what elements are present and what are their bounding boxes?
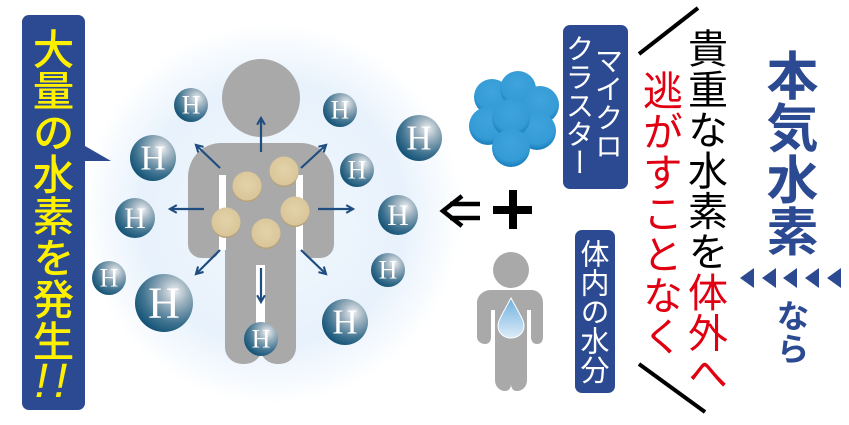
hydrogen spheres: H — [348, 156, 367, 184]
label text: 体内の水分 — [576, 239, 608, 384]
text: なら: なら — [772, 299, 809, 365]
callout tail — [85, 146, 111, 161]
bracket lines — [639, 8, 705, 412]
panel: 大量の水素を発生 callout — [22, 15, 85, 410]
hydrogen spheres: H — [331, 96, 350, 124]
hydrogen spheres: H — [406, 118, 432, 158]
heading: 貴重な水素を体外へ: 貴重な水素を 体外へ — [682, 28, 726, 393]
exclamation marks: !! — [35, 355, 73, 408]
slits highlight — [219, 175, 303, 250]
hydrogen spheres: H — [379, 256, 398, 284]
label text: クラスター: クラスター — [562, 34, 594, 176]
label text: マイクロ: マイクロ — [590, 46, 622, 160]
panel: 体内の水分 label — [575, 230, 615, 393]
small human with water drop — [477, 252, 543, 391]
hydrogen spheres: H — [140, 138, 166, 178]
hydrogen spheres: H — [124, 202, 146, 235]
title: 本気水素: 本気水素 — [758, 49, 816, 257]
micro cluster balls — [469, 71, 559, 167]
hydrogen spheres: H — [387, 199, 409, 232]
panel: マイクロクラスター label — [563, 25, 628, 189]
hydrogen spheres — [92, 88, 442, 356]
outward arrows — [170, 118, 353, 302]
hydrogen spheres: H — [148, 278, 180, 328]
hydrogen spheres: H — [100, 264, 119, 292]
hydrogen spheres: H — [182, 90, 201, 120]
callout text: 大量の水素を発生 — [26, 28, 74, 362]
large human silhouette — [188, 59, 334, 364]
double arrow — [443, 196, 480, 226]
leg gap — [256, 265, 265, 330]
blue glow background — [82, 24, 462, 404]
hydrogen spheres: H — [252, 324, 271, 354]
hydrogen spheres: H — [332, 302, 358, 342]
plus sign — [493, 190, 532, 229]
triangles — [740, 268, 841, 288]
heading: 逃がすことなく: 逃がすことなく — [637, 70, 681, 357]
tablets — [212, 156, 310, 249]
